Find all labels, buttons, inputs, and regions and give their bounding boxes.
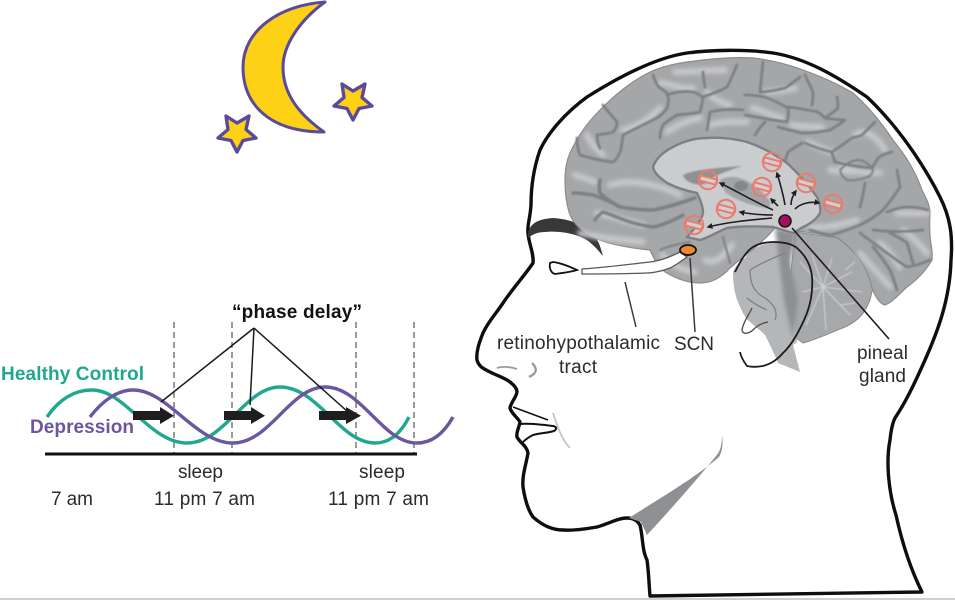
inhibition symbols: [683, 151, 844, 236]
brainstem folds: [747, 253, 785, 320]
sleep window dashed lines: [174, 322, 414, 454]
label: 11 pm 7 am second: 11 pm 7 am: [328, 489, 429, 510]
pons loop: [742, 308, 768, 333]
retinohypothalamic tract: [582, 252, 687, 274]
legend: depression: Depression: [30, 417, 134, 438]
curve: depression: [90, 387, 453, 443]
pointer: retinohypothalamic tract: [625, 282, 636, 327]
head outline: [477, 50, 952, 596]
time axis: [45, 452, 417, 456]
icon: left star: [218, 116, 256, 152]
pointer: pineal gland: [792, 228, 889, 339]
midbrain curve: [735, 242, 812, 367]
cerebellum: [785, 232, 873, 343]
gyri highlights: [575, 70, 927, 287]
arrow: shift 1: [133, 407, 174, 424]
brain: [550, 58, 932, 372]
inhibition symbol 4: [795, 172, 817, 194]
chin crease: [553, 413, 570, 448]
sulci: [573, 62, 930, 290]
label: SCN: SCN: [674, 334, 714, 355]
eye: [550, 262, 577, 274]
medial region: corpus callosum: [653, 138, 820, 240]
cerebrum silhouette: [565, 58, 932, 305]
inhibition symbol 6: [715, 198, 737, 220]
ventricle shading: [720, 177, 770, 208]
label: retinohypothalamic tract: [497, 333, 660, 378]
chart: circadian phase delay: [1, 302, 453, 510]
label: pineal gland: gland: [859, 366, 906, 387]
brainstem: [733, 243, 800, 372]
inhibition symbol 1: [761, 151, 783, 173]
label: sleep 2: sleep: [359, 462, 405, 483]
upper lip line: [513, 407, 548, 420]
legend: healthy control: Healthy Control: [1, 364, 144, 385]
neck shadow: [629, 435, 723, 535]
cerebellum white matter: [800, 255, 862, 330]
heading: phase delay: “phase delay”: [232, 302, 362, 323]
eyebrow: [528, 218, 603, 256]
ventricle core: [734, 181, 748, 191]
pineal gland marker: [779, 215, 791, 227]
arrow: shift 3: [319, 407, 361, 424]
mouth: [520, 424, 556, 442]
label: pineal gland: pineal: [857, 343, 908, 364]
thalamus band: [683, 166, 742, 185]
pointer: SCN: [690, 258, 695, 332]
nostril marks: [497, 363, 536, 377]
inhibition symbol 3: [751, 176, 773, 198]
brainstem shadow: [775, 228, 798, 340]
label: pineal gland: [857, 343, 908, 387]
inhibition arrows: [708, 173, 819, 227]
label: 11 pm 7 am first: 11 pm 7 am: [154, 489, 255, 510]
SCN marker: [680, 245, 696, 255]
label: retinohypothalamic tract: retinohypothalamic: [497, 333, 660, 354]
head profile: [477, 50, 952, 596]
inhibition symbol 5: [822, 193, 844, 215]
phase delay pointer lines: [161, 328, 348, 412]
label: retinohypothalamic tract: tract: [559, 357, 598, 378]
icon: crescent moon: [243, 2, 325, 132]
label: 7 am: 7 am: [51, 489, 93, 510]
arrow: shift 2: [224, 407, 265, 424]
label: sleep 1: sleep: [178, 462, 223, 483]
icon: right star: [334, 84, 372, 120]
inhibition symbol 7: [683, 214, 705, 236]
inhibition symbol 2: [697, 169, 719, 191]
curve: healthy control: [47, 387, 409, 443]
